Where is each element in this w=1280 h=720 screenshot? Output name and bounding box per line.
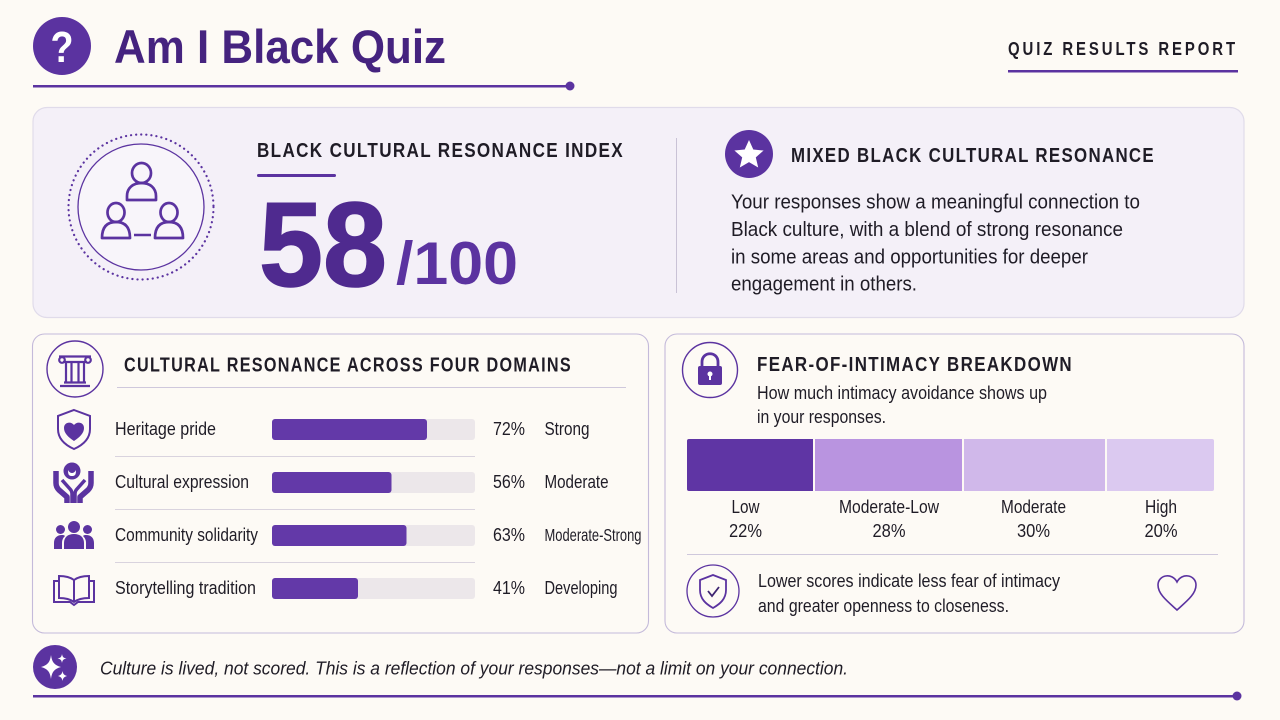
row: cultural expression: Cultural expression: [115, 471, 249, 492]
result description: Your responses show a meaningful connection to: [731, 192, 1140, 214]
row: storytelling tradition: 41%: [493, 578, 525, 598]
stacked bar: [687, 439, 1214, 491]
row: heritage pride: 72%: [493, 419, 525, 439]
row: storytelling tradition: [54, 576, 618, 605]
score: /100: [396, 230, 518, 297]
icon: star: [725, 130, 773, 178]
row: storytelling tradition: Storytelling tradition: [115, 577, 256, 598]
header: [33, 17, 1238, 90]
row: cultural expression: 56%: [493, 472, 525, 492]
note text: Lower scores indicate less fear of intimacy: [758, 571, 1060, 591]
segment labels: 22%: [729, 521, 762, 541]
title: Am I Black Quiz: [114, 20, 446, 73]
breakdown subtitle: in your responses.: [757, 407, 886, 427]
icon: people: [54, 521, 94, 549]
icon: heart: [1158, 576, 1196, 610]
row: community solidarity: Moderate-Strong: [544, 525, 642, 545]
segment labels: 28%: [872, 521, 906, 541]
icon: three people in circle: [68, 134, 214, 280]
result heading: MIXED BLACK CULTURAL RESONANCE: [791, 144, 1155, 167]
closing statement: Culture is lived, not scored. This is a reflection of your responses—not a limit on your connection.: [100, 658, 848, 678]
icon: question mark: ?: [50, 23, 74, 72]
note text: and greater openness to closeness.: [758, 596, 1009, 616]
row: heritage pride: Heritage pride: [115, 418, 216, 439]
segment labels: Moderate: [1001, 497, 1066, 517]
row: community solidarity: Community solidarity: [115, 524, 259, 545]
icon: shield check: [687, 565, 739, 617]
domains heading: CULTURAL RESONANCE ACROSS FOUR DOMAINS: [124, 354, 572, 376]
segment labels: [729, 497, 1178, 541]
segment labels: 30%: [1017, 521, 1050, 541]
segment labels: 20%: [1144, 521, 1178, 541]
row: heritage pride: Strong: [544, 418, 590, 439]
index heading: BLACK CULTURAL RESONANCE INDEX: [257, 139, 624, 162]
panel: fear-of-intimacy breakdown: [665, 334, 1244, 633]
breakdown subtitle: [757, 383, 1047, 427]
score: 58: [259, 178, 387, 312]
report tag: QUIZ RESULTS REPORT: [1008, 39, 1238, 59]
row: cultural expression: Moderate: [544, 471, 608, 492]
icon: padlock: [682, 342, 738, 398]
index heading: [257, 139, 624, 177]
result description: in some areas and opportunities for deeper: [731, 246, 1088, 268]
row: community solidarity: 63%: [493, 525, 525, 545]
icon: sparkles: [33, 645, 77, 689]
footer rule: [33, 692, 1242, 700]
segment labels: Moderate-Low: [839, 497, 940, 517]
icon: column: [47, 341, 103, 397]
result description: Black culture, with a blend of strong resonance: [731, 219, 1123, 241]
result description: engagement in others.: [731, 274, 917, 296]
row: cultural expression: [56, 462, 608, 503]
panel: cultural domains: [32, 334, 648, 633]
title rule: [33, 82, 574, 90]
breakdown subtitle: How much intimacy avoidance shows up: [757, 383, 1047, 403]
segment labels: Low: [732, 497, 760, 517]
result description: [731, 192, 1140, 296]
icon: shield heart: [58, 410, 90, 449]
row: storytelling tradition: Developing: [544, 577, 618, 598]
icon: question mark: [33, 17, 91, 75]
row: community solidarity: [54, 521, 642, 549]
row: heritage pride: [58, 410, 590, 449]
breakdown heading: FEAR-OF-INTIMACY BREAKDOWN: [757, 354, 1073, 376]
panel: index summary: [33, 108, 1244, 318]
score: [259, 178, 518, 312]
icon: hands: [56, 462, 91, 503]
segment labels: High: [1145, 497, 1177, 517]
icon: open book: [54, 576, 94, 605]
note text: [758, 571, 1060, 616]
footer: [33, 645, 1242, 700]
